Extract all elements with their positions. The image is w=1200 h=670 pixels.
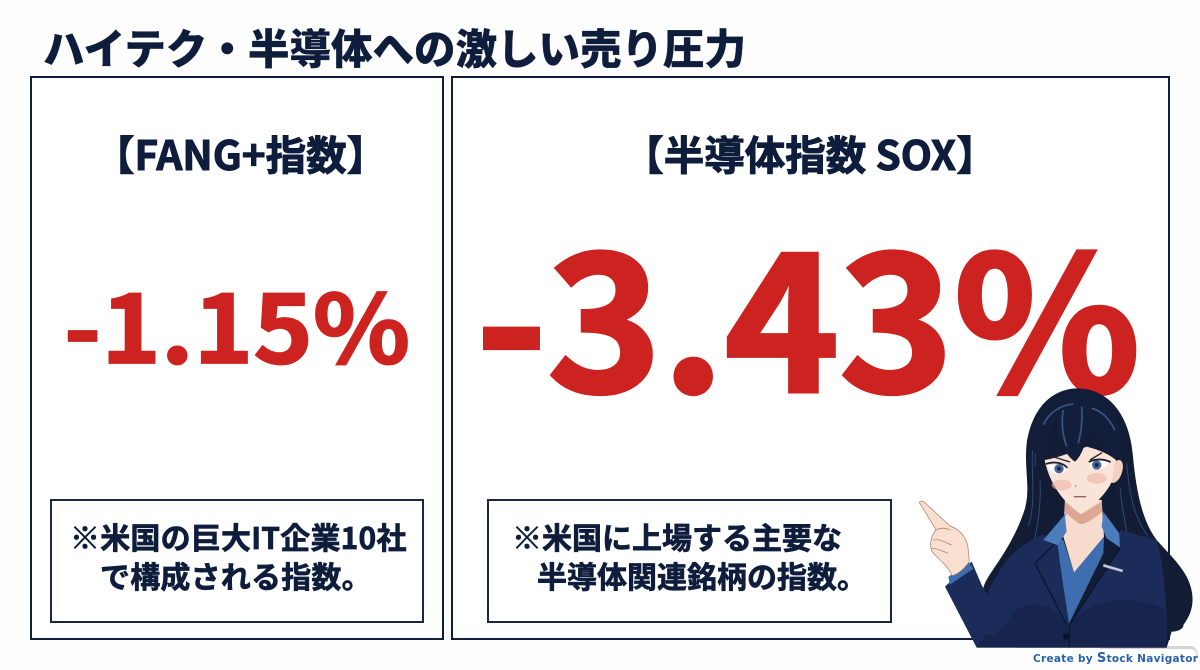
value: SOX change: -3.43% — [475, 176, 1141, 445]
button — [1063, 634, 1069, 640]
panel: FANG+ index — [30, 76, 444, 640]
heading: SOX: 【半導体指数 SOX】 — [623, 123, 997, 182]
hair back — [983, 388, 1193, 648]
eyes — [1046, 453, 1111, 474]
shirt — [1057, 537, 1104, 625]
shirt collar — [1043, 512, 1120, 547]
name badge — [1103, 565, 1123, 571]
hair strands — [1028, 420, 1148, 553]
value: FANG+ change: -1.15% — [64, 255, 410, 391]
note: SOX description — [487, 499, 892, 623]
neck shadow — [1065, 502, 1102, 524]
face — [1045, 447, 1116, 514]
title: ハイテク・半導体への激しい売り圧力 — [43, 16, 746, 76]
note text: 半導体関連銘柄の指数。 — [537, 552, 867, 596]
icon: presenter character — [919, 388, 1193, 648]
cuff — [948, 563, 973, 585]
mouth — [1074, 495, 1086, 499]
footer credit: Create by Stock Navigator — [1033, 651, 1198, 666]
footer strip — [0, 647, 1200, 670]
panel: SOX index — [451, 76, 1170, 640]
ear — [1111, 460, 1123, 483]
note text: ※米国の巨大IT企業10社 — [70, 514, 407, 558]
note text: ※米国に上場する主要な — [512, 514, 842, 558]
hand — [919, 501, 969, 576]
finger lines — [932, 528, 952, 553]
jacket lower shade — [977, 600, 1167, 648]
note text — [70, 514, 407, 596]
blush — [1052, 480, 1072, 490]
jacket — [945, 530, 1167, 648]
nose — [1074, 485, 1078, 487]
footer tab shadow — [1100, 646, 1198, 658]
note: FANG+ description — [50, 499, 424, 623]
heading: FANG+: 【FANG+指数】 — [94, 123, 387, 182]
note text: で構成される指数。 — [100, 552, 372, 596]
lapel lines — [1035, 542, 1120, 648]
neck and chest — [1063, 498, 1104, 573]
hair highlight — [1043, 404, 1115, 447]
bangs — [1031, 391, 1120, 462]
note text — [512, 514, 867, 596]
